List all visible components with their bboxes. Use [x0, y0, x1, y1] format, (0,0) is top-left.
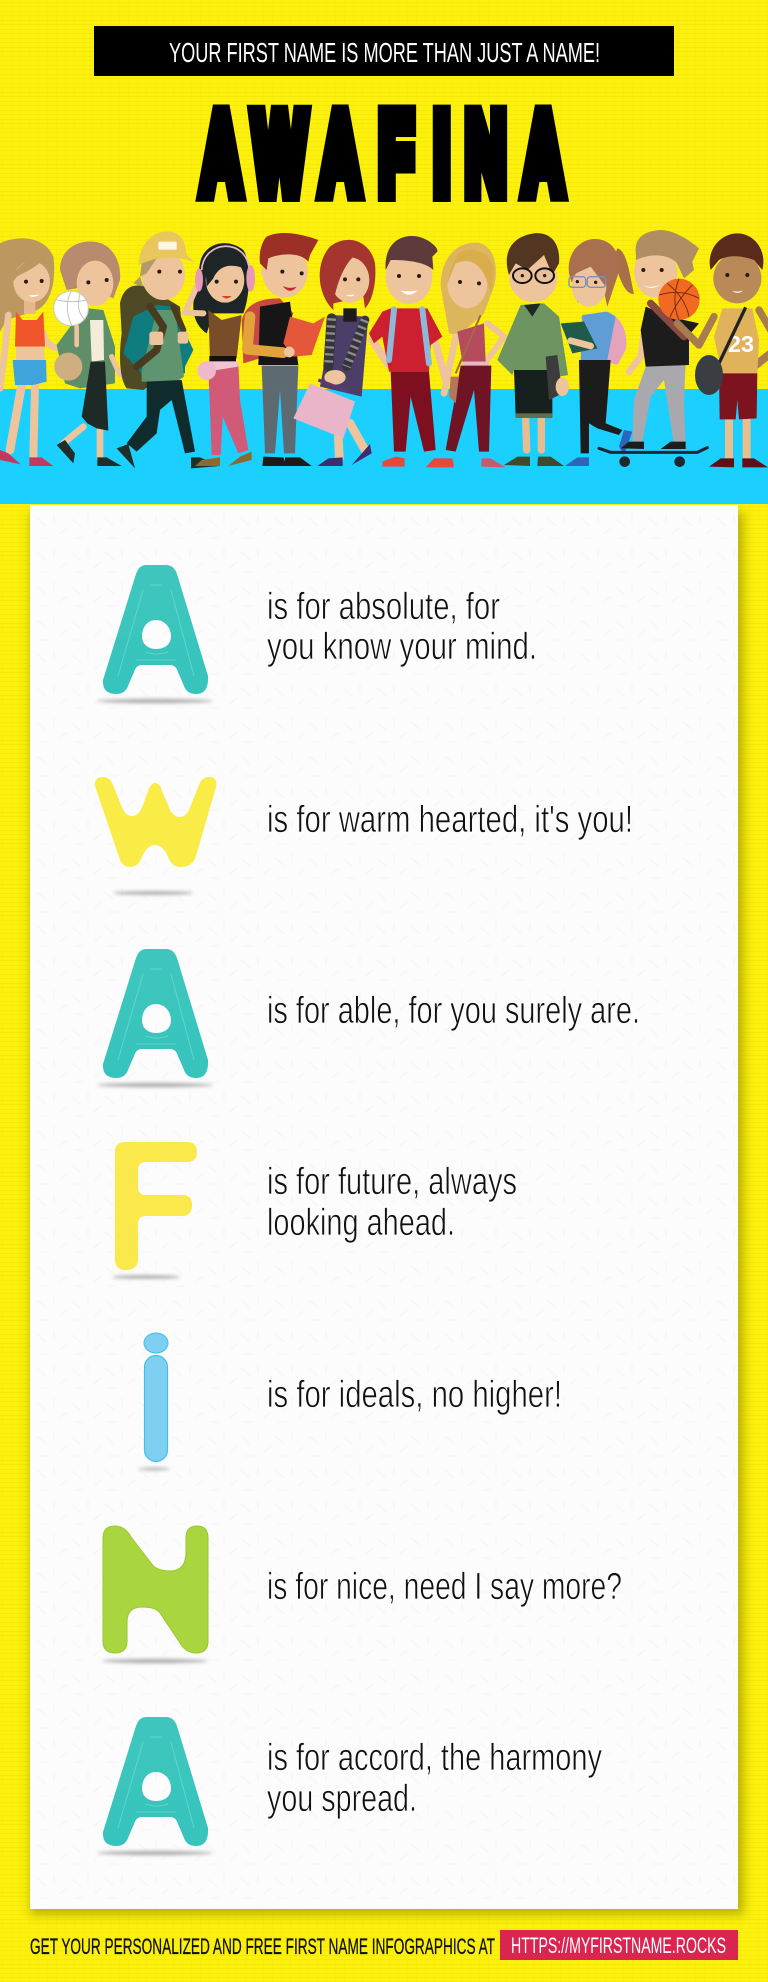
row 6: letter N: [102, 1526, 622, 1663]
letter A icon: [97, 949, 213, 1087]
left group of six students: [0, 231, 375, 468]
footer call to action: GET YOUR PERSONALIZED AND FREE FIRST NAME INFOGRAPHICS AT: [30, 1934, 495, 1959]
text: F meaning: is for future, always: [267, 1161, 517, 1203]
text: F meaning: looking ahead.: [267, 1202, 455, 1244]
text: A meaning: is for able, for you surely are.: [267, 990, 640, 1032]
text: A meaning: is for accord, the harmony: [267, 1737, 602, 1779]
student 11: boy on skateboard with basketball: [599, 230, 714, 467]
student 7: boy in red shirt: [369, 236, 454, 467]
student 9: boy with glasses: [497, 233, 569, 466]
title: name: AWAFINA: [201, 91, 563, 216]
student 5: boy reading a book: [242, 233, 325, 466]
letter N icon: [102, 1526, 208, 1663]
header banner: [94, 26, 674, 76]
row 1: letter A: [97, 565, 537, 703]
right group of six students: [369, 230, 768, 467]
student 6: girl with pink bag: [293, 240, 375, 466]
student 10: girl with pink backpack and tablet: [561, 239, 634, 466]
row 5: letter I: [138, 1333, 562, 1470]
text: W meaning: is for warm hearted, it's you!: [267, 799, 633, 841]
student 4: girl with headphones: [185, 243, 255, 466]
student 12: boy in number 23 tank top: [695, 233, 768, 467]
row 7: letter A: [97, 1717, 602, 1855]
panel: letter meanings: [30, 505, 744, 1915]
text: A meaning: you spread.: [267, 1778, 417, 1820]
letter I icon: [138, 1333, 170, 1470]
text: A meaning: is for absolute, for: [267, 586, 500, 628]
student 2: girl in green jacket with volleyball: [54, 241, 122, 466]
row 4: letter F: [112, 1142, 517, 1279]
letter F icon: [112, 1142, 197, 1279]
illustration: group of students: [0, 230, 768, 504]
letter A icon: [97, 1717, 213, 1855]
text: A meaning: [267, 1737, 602, 1820]
student 8: blonde girl: [441, 243, 506, 467]
letter A icon: [97, 565, 213, 703]
footer: [30, 1930, 738, 1960]
student 12: boy in number 23 tank top: 23: [728, 331, 754, 357]
row 3: letter A: [97, 949, 640, 1087]
text: F meaning: [267, 1161, 517, 1244]
row 2: letter W: [95, 777, 633, 895]
text: I meaning: is for ideals, no higher!: [267, 1374, 562, 1416]
ground band: [0, 389, 768, 504]
student 1: girl in orange top: [0, 238, 77, 466]
student 3: boy with backpack and cap: [117, 231, 220, 468]
text: A meaning: [267, 586, 537, 668]
text: A meaning: you know your mind.: [267, 626, 537, 668]
letter W icon: [95, 777, 216, 895]
text: N meaning: is for nice, need I say more?: [267, 1566, 622, 1608]
